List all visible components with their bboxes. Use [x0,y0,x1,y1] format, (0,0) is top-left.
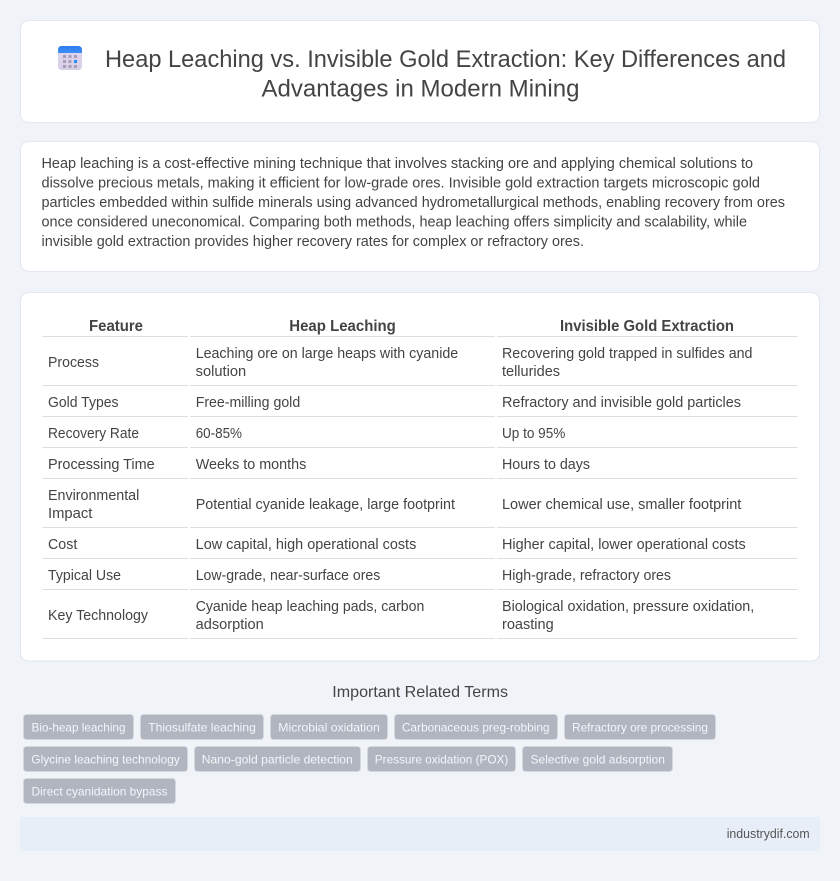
table header row: Invisible Gold Extraction [560,318,734,335]
table row: environmental impact: Impact [48,506,92,522]
table row: key technology: adsorption [196,617,264,633]
table row: recovery rate: 60-85% [196,426,242,442]
table row: process: solution [196,364,246,380]
tag: refractory ore processing: Refractory ore processing [572,720,708,734]
table row: process: Leaching ore on large heaps with cyanide [196,346,458,362]
related term tags [24,714,716,804]
table row: gold types [48,395,741,411]
table row: recovery rate [48,426,565,442]
table row: typical use: Typical Use [48,568,121,584]
tag: bio-heap leaching: Bio-heap leaching [32,720,126,734]
table row: gold types: Gold Types [48,395,118,411]
table row: environmental impact [48,488,741,522]
footer: industrydif.com [727,826,810,841]
table row: typical use: High-grade, refractory ores [502,568,671,584]
table row: gold types: Free-milling gold [196,395,300,411]
tag: nano-gold particle detection: Nano-gold particle detection [202,752,353,766]
table row: key technology: Biological oxidation, pressure oxidation, [502,599,754,615]
tag: selective gold adsorption [522,746,672,772]
panel: comparison table [20,292,820,661]
table row: recovery rate: Recovery Rate [48,426,139,442]
table header row [89,318,734,335]
tag: pressure oxidation [368,746,516,772]
table row: cost [48,537,746,553]
tag: nano-gold particle detection [194,746,360,772]
table row: key technology: Cyanide heap leaching pads, carbon [196,599,424,615]
text block: introduction paragraph: Heap leaching is a cost-effective mining technique that involves stacking ore and applying chemical solutions to [42,156,753,172]
table row: process: tellurides [502,364,560,380]
tag: glycine leaching technology [24,746,188,772]
tag: direct cyanidation bypass [24,778,176,804]
table row: recovery rate: Up to 95% [502,426,565,442]
table row: cost: Cost [48,537,77,553]
table row: processing time [48,457,590,473]
tag: carbonaceous preg-robbing: Carbonaceous preg-robbing [402,720,550,734]
icon: calendar [58,46,82,70]
table row: key technology: roasting [502,617,554,633]
table row: process [48,346,752,380]
tag: selective gold adsorption: Selective gold adsorption [530,752,665,766]
table row: processing time: Hours to days [502,457,590,473]
table row: key technology [48,599,754,633]
tag: direct cyanidation bypass: Direct cyanidation bypass [32,784,168,798]
table row: environmental impact: Environmental [48,488,139,504]
table row: environmental impact: Lower chemical use, smaller footprint [502,497,741,513]
title: Advantages in Modern Mining [262,76,580,102]
footer [20,817,820,851]
table row: cost: Low capital, high operational costs [196,537,416,553]
tag: thiosulfate leaching [140,714,264,740]
table header row: Feature [89,318,143,335]
table row: key technology: Key Technology [48,608,149,624]
tag: microbial oxidation: Microbial oxidation [278,720,380,734]
text block: introduction paragraph: once considered uneconomical. Comparing both methods, heap leaching offers simplicity and scalability, while [42,214,747,230]
title [105,46,786,102]
title: Heap Leaching vs. Invisible Gold Extraction: Key Differences and [105,46,786,73]
panel: introduction [20,142,820,272]
tag: carbonaceous preg-robbing [394,714,558,740]
heading: related terms: Important Related Terms [332,684,508,701]
tag: microbial oxidation [270,714,388,740]
table row: processing time: Processing Time [48,457,155,473]
tag: glycine leaching technology: Glycine leaching technology [31,752,180,766]
tag: refractory ore processing [564,714,716,740]
table row: environmental impact: Potential cyanide leakage, large footprint [196,497,455,513]
text block: introduction paragraph: invisible gold extraction provides higher recovery rates for complex or refractory ores. [42,234,584,250]
table row: typical use [48,568,671,584]
text block: introduction paragraph [42,156,785,250]
tag: thiosulfate leaching: Thiosulfate leaching [148,720,256,734]
table row: process: Recovering gold trapped in sulfides and [502,346,752,362]
table row: typical use: Low-grade, near-surface ores [196,568,380,584]
table row: process: Process [48,355,99,371]
tag: bio-heap leaching [24,714,134,740]
panel: header [20,20,820,122]
text block: introduction paragraph: dissolve precious metals, making it efficient for low-grade ores. Invisible gold extraction targets microscopic gold [42,176,760,192]
table row: gold types: Refractory and invisible gold particles [502,395,741,411]
table row: processing time: Weeks to months [196,457,306,473]
tag: pressure oxidation: Pressure oxidation (POX) [375,752,508,766]
table header row: Heap Leaching [289,318,396,335]
text block: introduction paragraph: particles embedded within sulfide minerals using advanced hydrometallurgical methods, enabling recovery from ores [42,195,785,211]
table row: cost: Higher capital, lower operational costs [502,537,746,553]
